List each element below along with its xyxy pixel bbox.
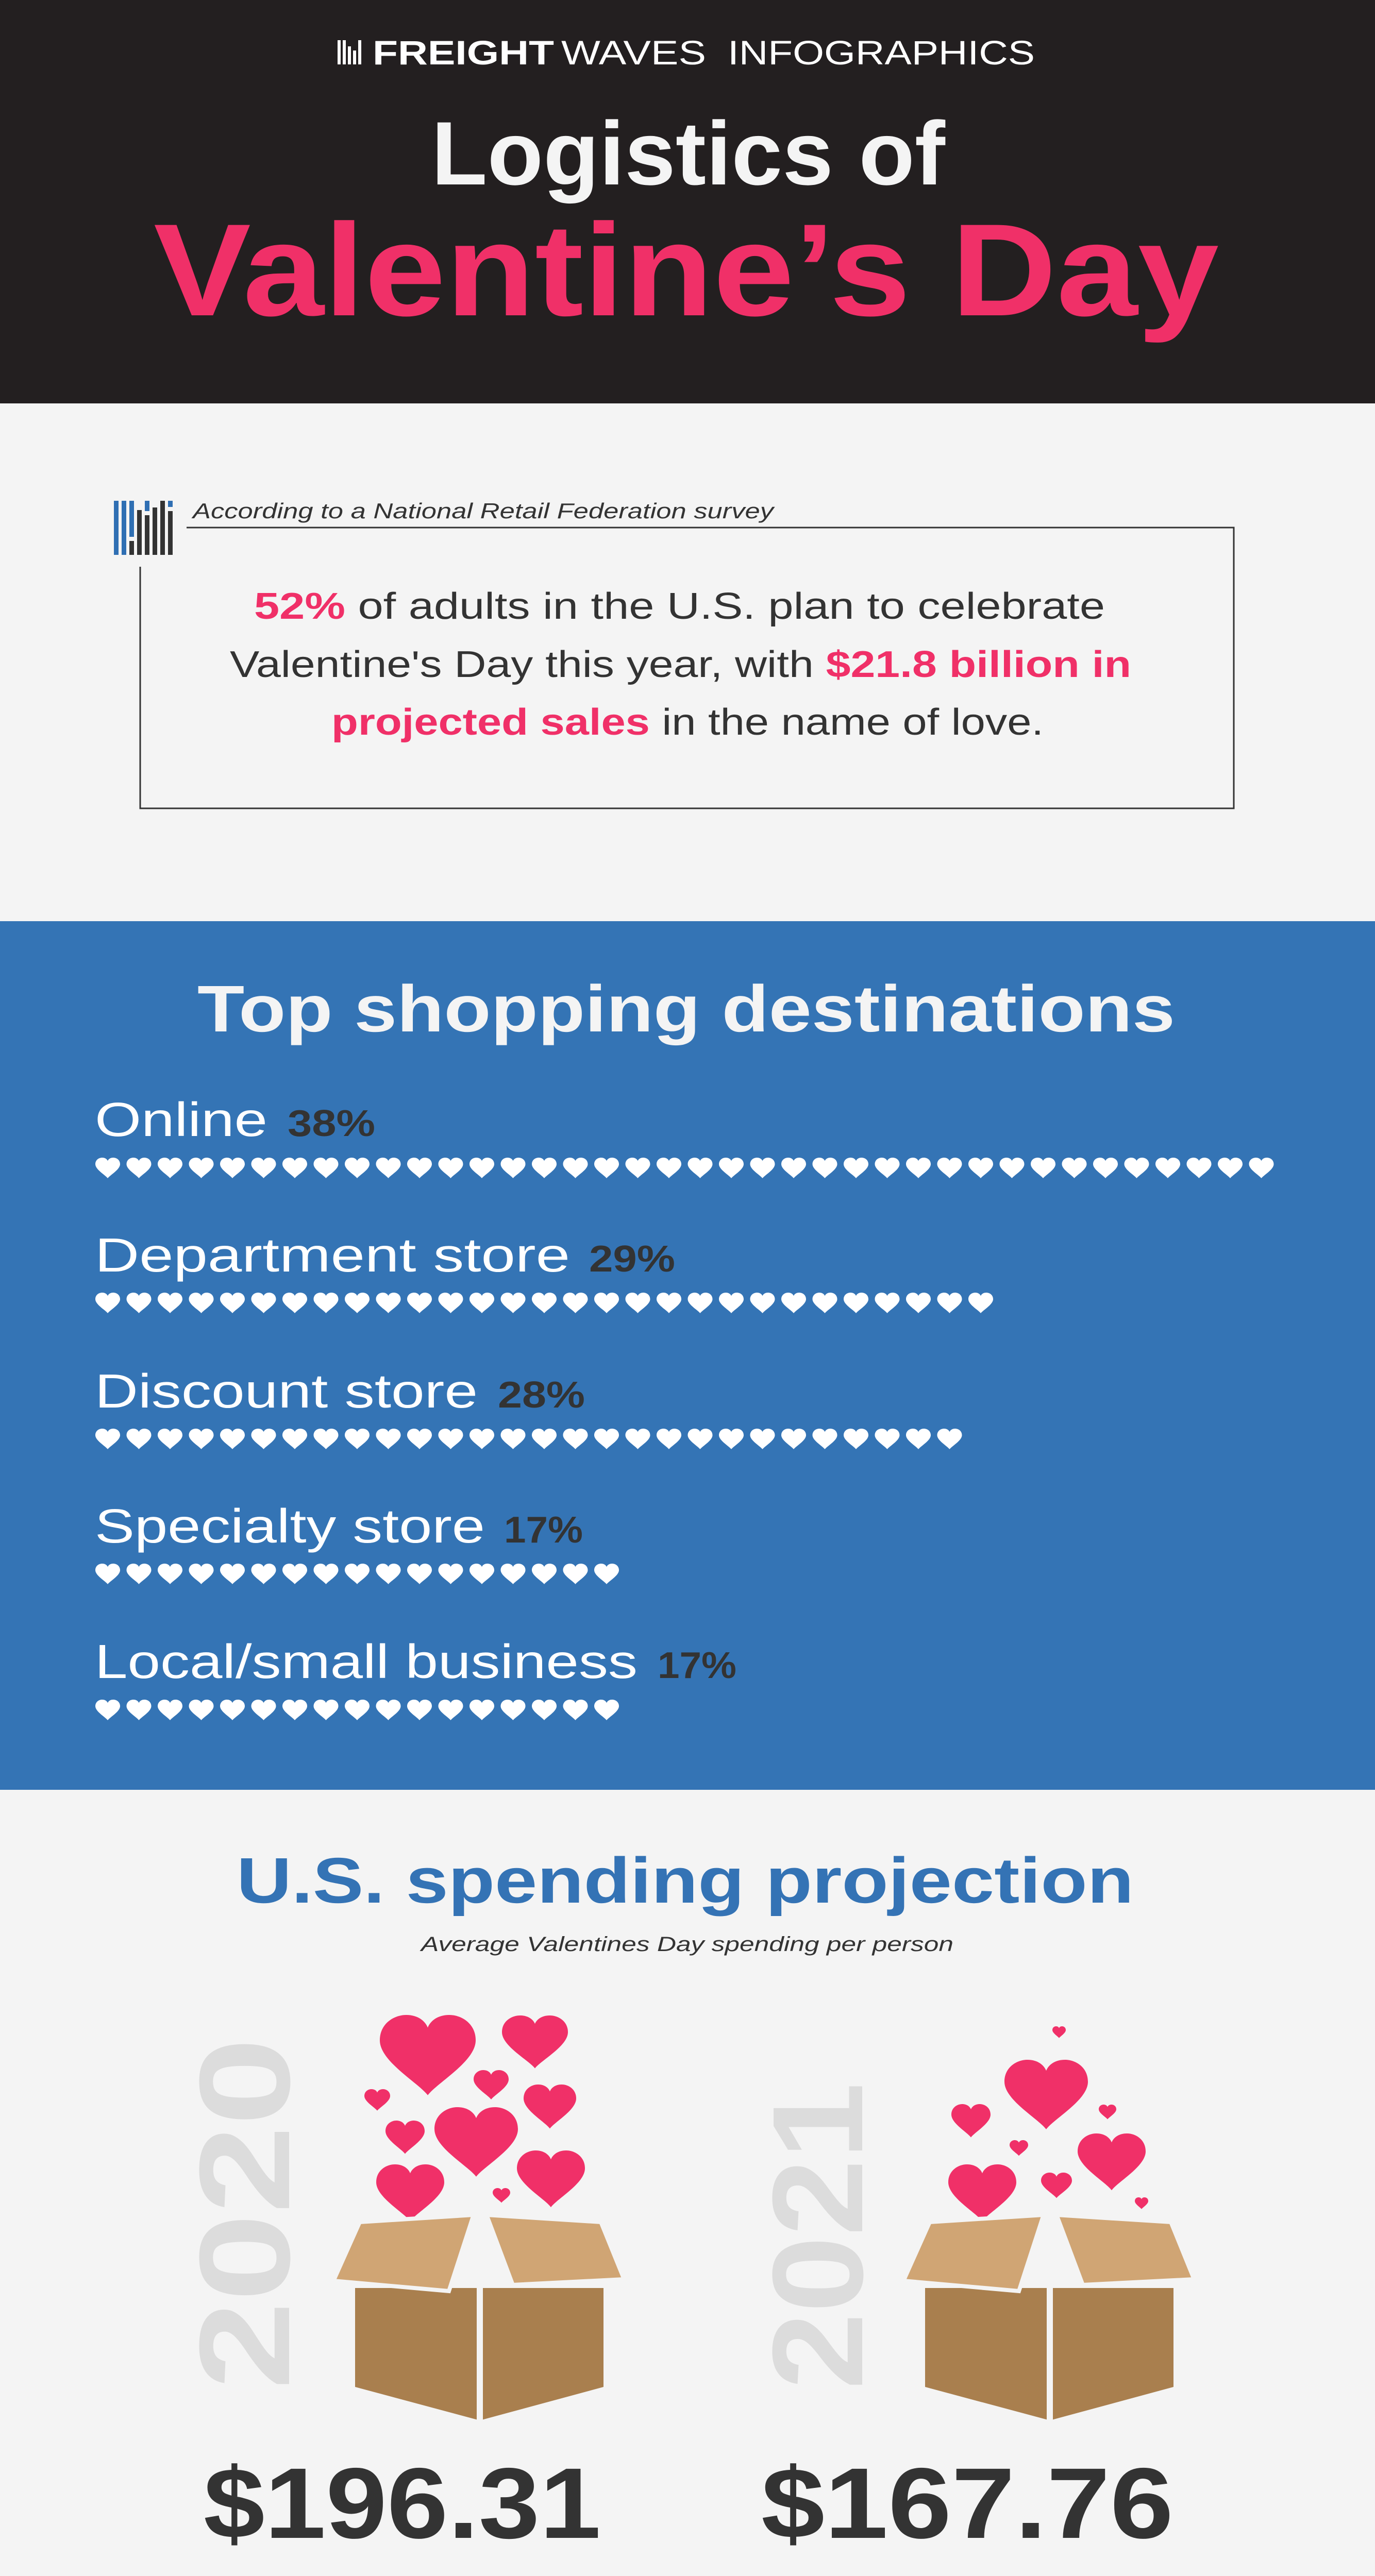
icon: hearts 2021 bbox=[948, 2026, 1148, 2221]
header logo bbox=[338, 33, 1035, 72]
row: discount store bbox=[95, 1364, 962, 1449]
survey source text: According to a National Retail Federation survey bbox=[191, 499, 776, 523]
row: department store: Department store bbox=[95, 1228, 570, 1282]
row: local/small business: 17% bbox=[658, 1645, 736, 1686]
amount 2021: $167.76 bbox=[761, 2447, 1173, 2560]
panel: top shopping destinations bbox=[0, 921, 1375, 1790]
row: specialty store: 17% bbox=[504, 1510, 583, 1551]
header panel bbox=[0, 0, 1375, 403]
row: online: Online bbox=[95, 1093, 267, 1146]
year label 2020: 2020 bbox=[173, 2038, 316, 2389]
row: local/small business bbox=[95, 1635, 736, 1720]
row: online bbox=[95, 1093, 1274, 1178]
row: discount store: Discount store bbox=[95, 1364, 478, 1418]
subtitle: Average Valentines Day spending per person bbox=[420, 1933, 953, 1956]
panel: spending projection bbox=[173, 1845, 1194, 2576]
heading: U.S. spending projection bbox=[237, 1845, 1134, 1917]
year label 2021: 2021 bbox=[746, 2082, 890, 2389]
header logo: FREIGHT bbox=[373, 33, 554, 72]
stat text: 52% of adults in the U.S. plan to celebrate bbox=[254, 586, 1105, 627]
survey callout bbox=[114, 499, 1234, 808]
stat text: Valentine's Day this year, with $21.8 billion in bbox=[230, 644, 1131, 685]
heading: Top shopping destinations bbox=[197, 972, 1175, 1046]
title line 2: Valentine’s Day bbox=[154, 197, 1219, 344]
stat text bbox=[230, 586, 1131, 743]
header logo: WAVES bbox=[561, 33, 706, 72]
icon: box 2020 bbox=[333, 2215, 624, 2421]
row: discount store: 28% bbox=[498, 1375, 585, 1416]
amount 2020: $196.31 bbox=[204, 2447, 601, 2560]
icon: hearts 2020 bbox=[364, 2015, 585, 2221]
row: department store: 29% bbox=[589, 1239, 675, 1280]
title line 1: Logistics of bbox=[431, 104, 946, 204]
row: online: 38% bbox=[288, 1103, 375, 1144]
row: specialty store: Specialty store bbox=[95, 1499, 485, 1553]
row: specialty store bbox=[95, 1499, 619, 1584]
row: department store bbox=[95, 1228, 993, 1313]
icon: box 2021 bbox=[903, 2215, 1194, 2421]
icon: freightwaves mark bbox=[114, 501, 173, 555]
row: local/small business: Local/small business bbox=[95, 1635, 638, 1688]
header logo: INFOGRAPHICS bbox=[728, 33, 1035, 72]
stat text: projected sales in the name of love. bbox=[331, 702, 1044, 743]
